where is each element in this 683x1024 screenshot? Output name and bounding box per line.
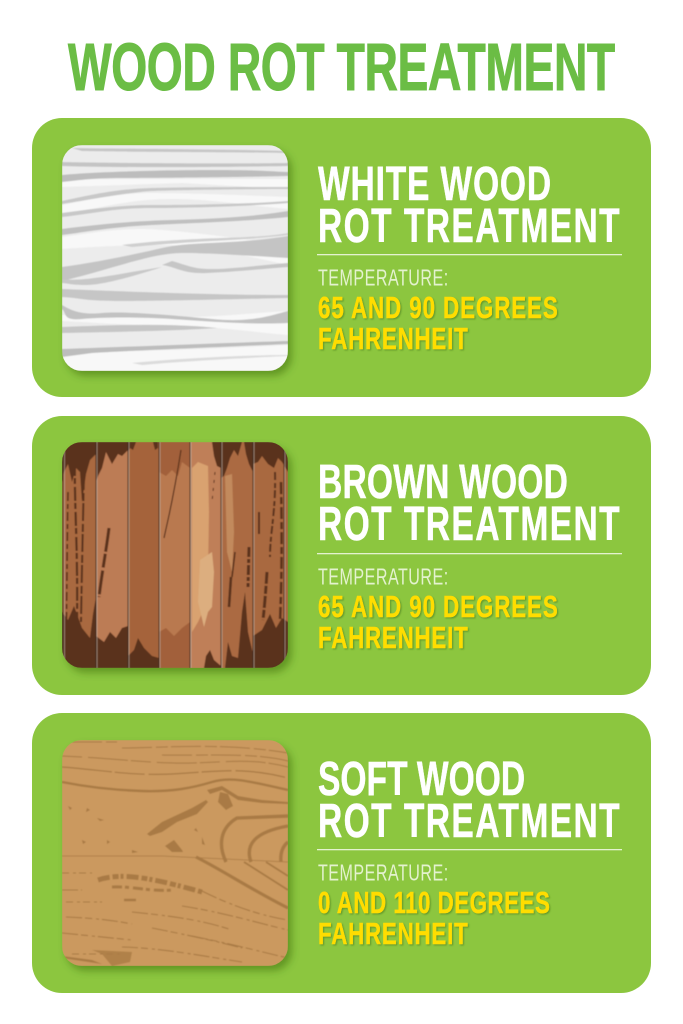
temperature value (318, 589, 558, 655)
image: white wood texture (62, 145, 288, 371)
plank gaps (63, 442, 284, 668)
heading: ROT TREATMENT (318, 793, 620, 847)
panel: soft wood rot (32, 713, 651, 993)
temperature value: 0 AND 110 DEGREES (318, 885, 550, 920)
image: soft wood texture (62, 740, 288, 966)
temperature value: 65 AND 90 DEGREES (318, 290, 558, 325)
heading (318, 454, 620, 550)
temperature value (318, 290, 558, 356)
temperature value (318, 885, 550, 951)
image: brown wood texture (62, 442, 288, 668)
panel: brown wood rot (32, 416, 651, 695)
heading: WHITE WOOD (318, 156, 551, 210)
heading (318, 751, 620, 847)
dark top (62, 442, 288, 502)
title: WOOD ROT TREATMENT (68, 31, 615, 105)
panel: white wood rot (32, 118, 651, 397)
temperature label: TEMPERATURE: (318, 266, 448, 291)
temperature value: FAHRENHEIT (318, 916, 468, 951)
heading: ROT TREATMENT (318, 496, 620, 550)
heading: BROWN WOOD (318, 454, 568, 508)
heading (318, 156, 620, 252)
temperature value: 65 AND 90 DEGREES (318, 589, 558, 624)
dark bottom (62, 592, 288, 668)
temperature value: FAHRENHEIT (318, 620, 468, 655)
heading: ROT TREATMENT (318, 198, 620, 252)
temperature label: TEMPERATURE: (318, 565, 448, 590)
heading: SOFT WOOD (318, 751, 525, 805)
temperature label: TEMPERATURE: (318, 861, 448, 886)
temperature value: FAHRENHEIT (318, 321, 468, 356)
dark side streaks (65, 450, 284, 622)
